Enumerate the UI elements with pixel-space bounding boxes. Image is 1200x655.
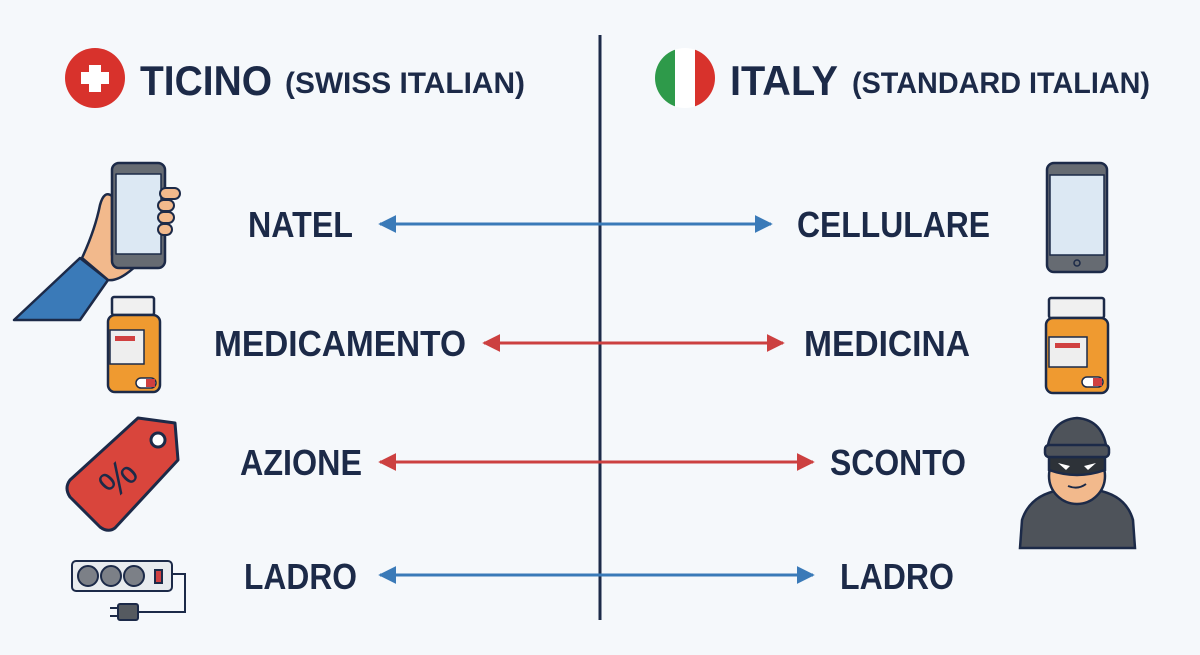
heading: Italy: (STANDARD ITALIAN)	[852, 67, 1150, 100]
icon: phone right	[1047, 163, 1107, 272]
icon: power strip	[72, 561, 185, 620]
row 2: MEDICAMENTO / MEDICINA: MEDICINA	[804, 323, 970, 364]
divider line	[598, 35, 602, 620]
row 3: AZIONE / SCONTO: SCONTO	[830, 442, 966, 483]
heading: Italy: ITALY	[730, 57, 838, 104]
row 1: NATEL / CELLULARE	[248, 204, 990, 245]
heading: Italy	[655, 48, 1150, 108]
icon: Italian flag	[655, 48, 715, 108]
heading: Ticino: TICINO	[140, 57, 272, 104]
heading: Ticino: (SWISS ITALIAN)	[285, 67, 525, 100]
row 4: LADRO / LADRO	[244, 556, 954, 597]
icon: Swiss flag	[65, 48, 125, 108]
row 1: NATEL / CELLULARE: CELLULARE	[797, 204, 990, 245]
icon: hand holding phone	[14, 163, 180, 320]
icon: medicine bottle left	[108, 297, 160, 392]
row 3: AZIONE / SCONTO: AZIONE	[240, 442, 362, 483]
row 3: AZIONE / SCONTO	[240, 442, 966, 483]
row 1: NATEL / CELLULARE: NATEL	[248, 204, 353, 245]
row 2: MEDICAMENTO / MEDICINA	[214, 323, 970, 364]
icon: discount tag	[67, 418, 178, 530]
icon: discount tag: %	[90, 451, 147, 507]
row 2: MEDICAMENTO / MEDICINA: MEDICAMENTO	[214, 323, 466, 364]
heading: Ticino	[65, 48, 525, 108]
icon: medicine bottle right	[1046, 298, 1108, 393]
row 4: LADRO / LADRO: LADRO	[244, 556, 357, 597]
icon: thief	[1020, 418, 1135, 548]
row 4: LADRO / LADRO: LADRO	[840, 556, 954, 597]
